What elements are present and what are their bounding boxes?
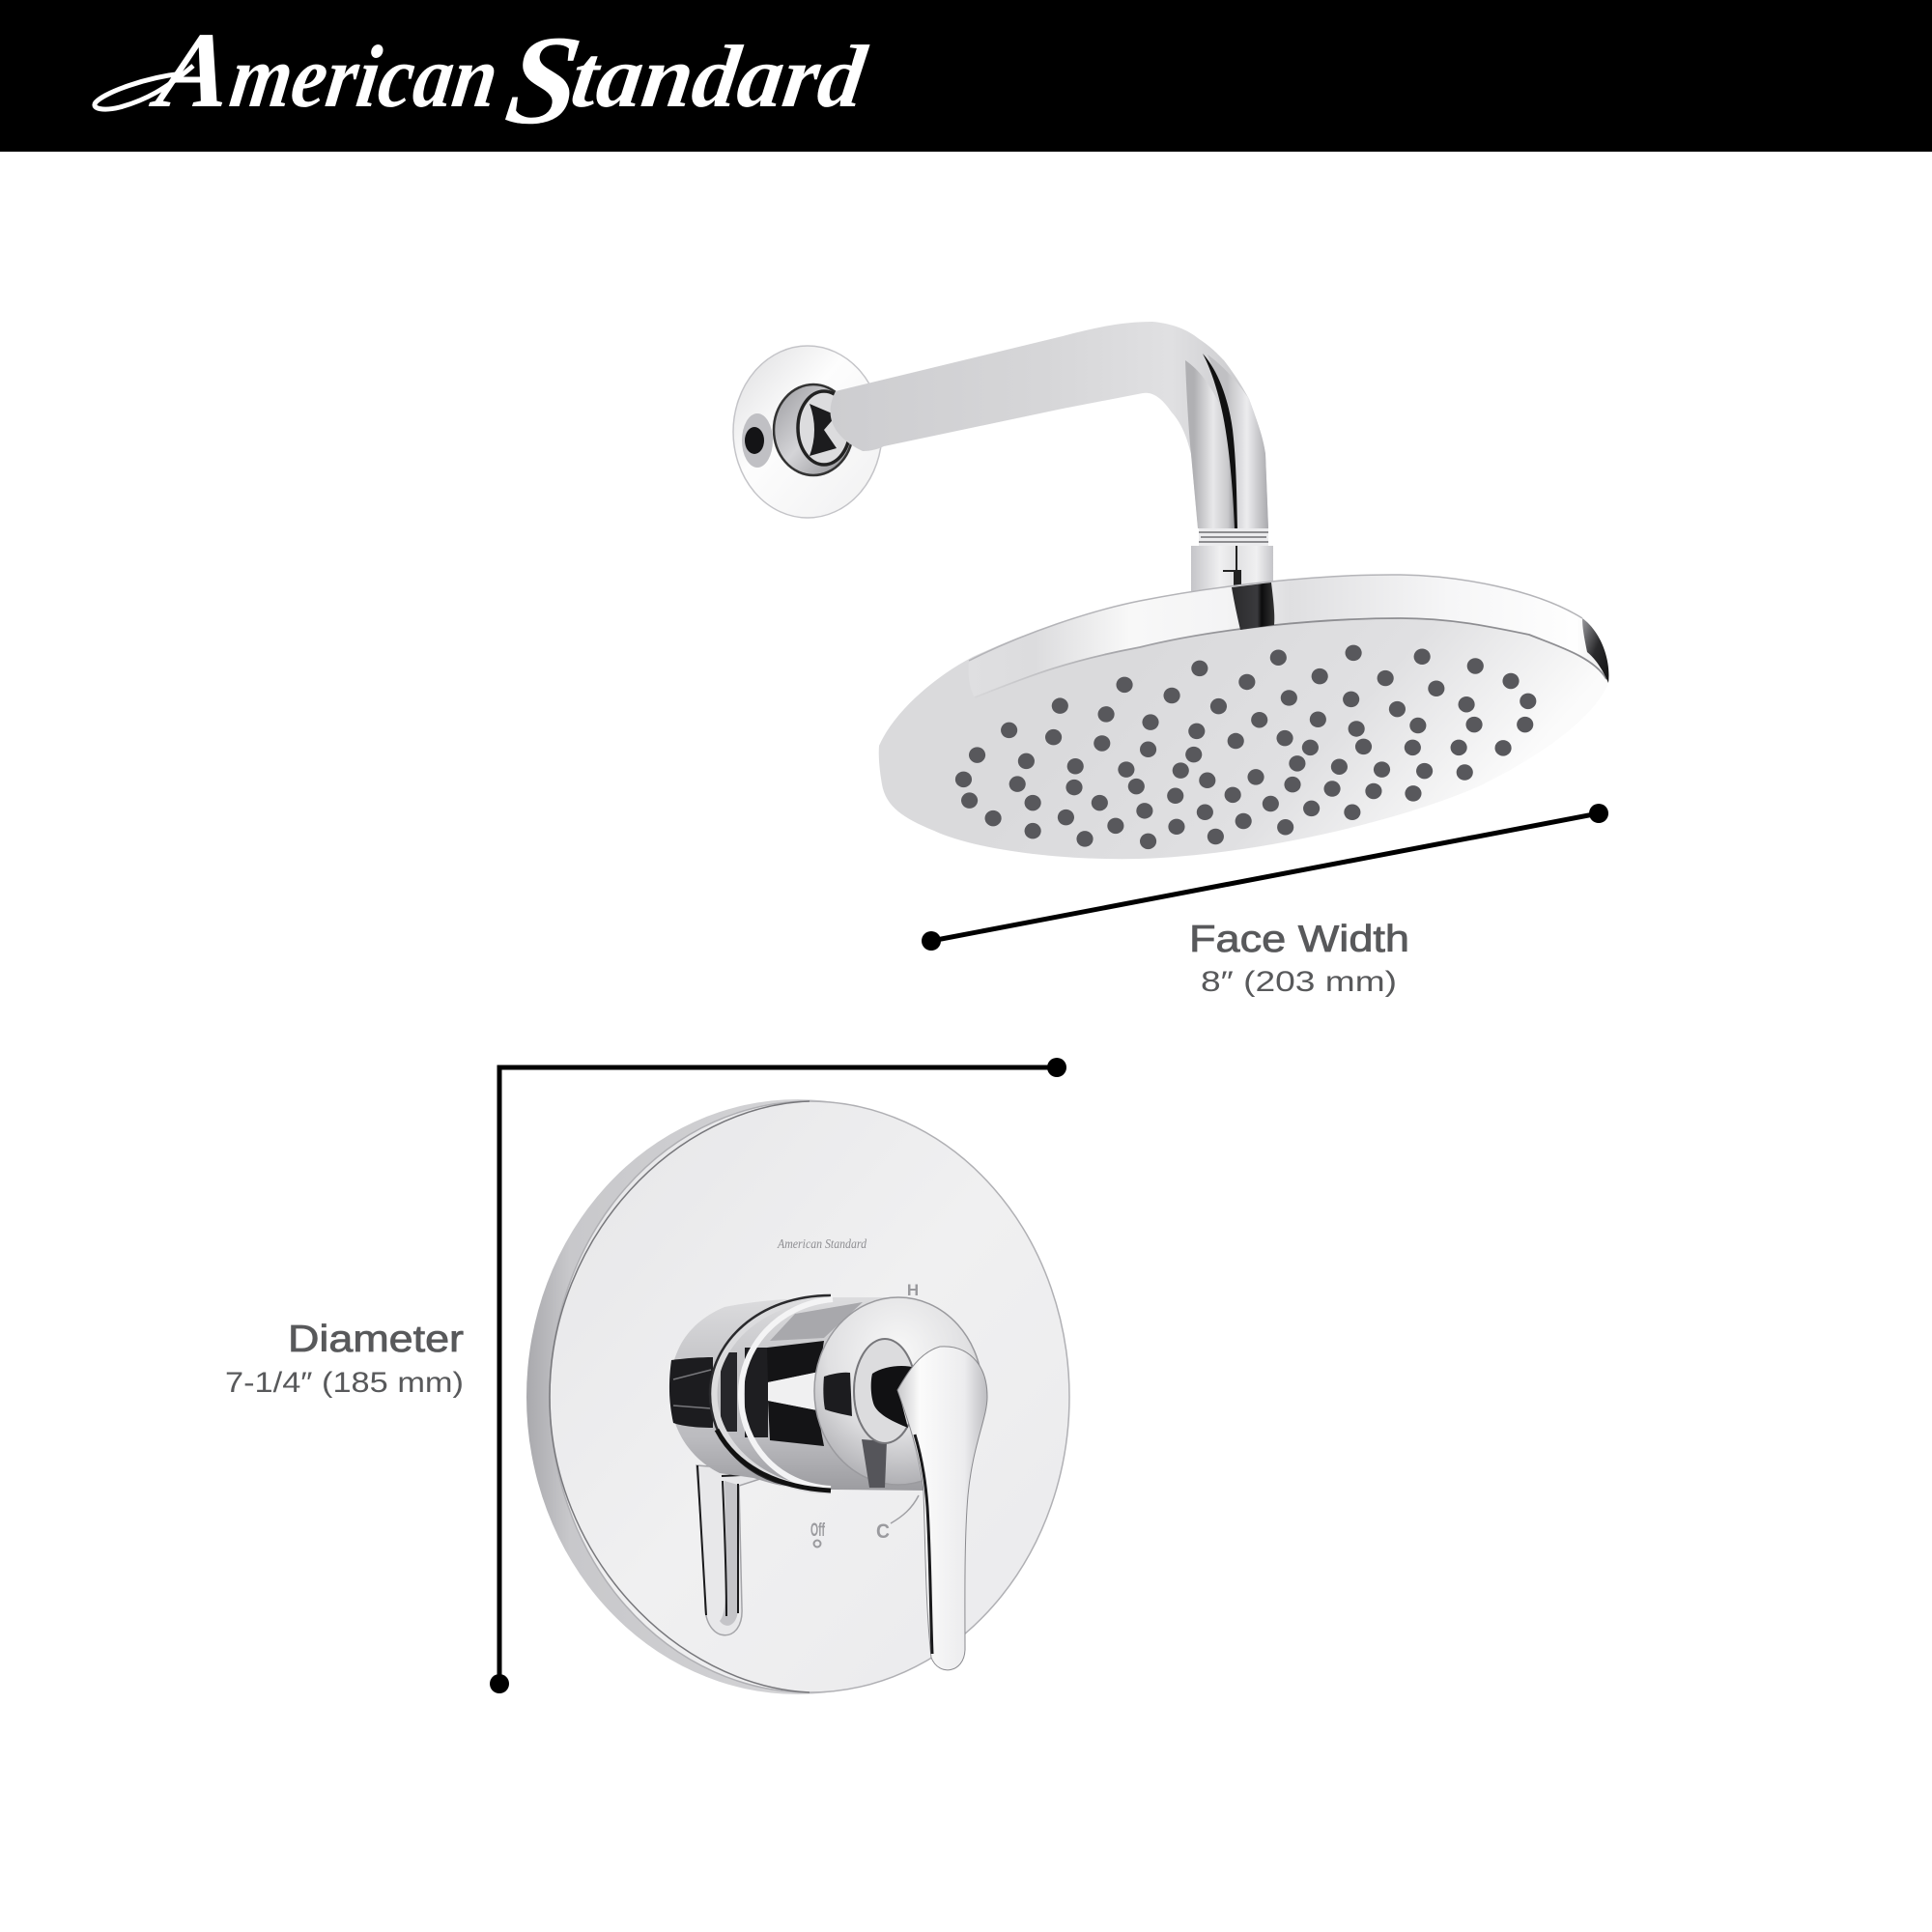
valve cylinder (669, 1297, 927, 1491)
band inner (745, 1348, 768, 1437)
logo: American Standard (95, 10, 875, 151)
logo wordmark: S (498, 10, 589, 151)
upper dark block (767, 1341, 824, 1382)
nut inner ring (798, 391, 850, 465)
cap streak (673, 1370, 711, 1408)
ring one (714, 1297, 831, 1491)
label: face width: 8″ (203 mm) (1201, 966, 1397, 998)
flange hole reflection (742, 413, 773, 468)
back plate rim (526, 1099, 1069, 1694)
dimension line: diameter (490, 1058, 1066, 1693)
diverter centre shade (720, 1481, 738, 1626)
nut (774, 384, 853, 475)
rim inner edge (975, 618, 1606, 697)
logo wordmark: merican (225, 27, 504, 126)
sleeve (1191, 546, 1273, 594)
label: diameter: Diameter (288, 1319, 464, 1360)
ring lower shadow (717, 1430, 831, 1491)
knurled top (770, 1302, 863, 1341)
lever edge line (915, 1435, 932, 1654)
label: face width (1189, 919, 1409, 998)
spray holes (955, 645, 1536, 849)
stem dark (871, 1366, 916, 1428)
hub lower reflections (862, 1439, 887, 1488)
mid body highlight (768, 1372, 819, 1410)
diverter edge lines (697, 1465, 763, 1616)
hub disc (814, 1297, 982, 1485)
head body and face (879, 575, 1608, 859)
label: diameter (225, 1319, 464, 1399)
band between rings (721, 1352, 737, 1432)
flange hole (745, 427, 764, 454)
logo swash (95, 66, 193, 109)
shower valve trim (526, 1099, 1069, 1694)
shower arm (831, 322, 1268, 528)
cap dark reflection (669, 1357, 713, 1428)
label: diameter: 7-1/4″ (185 mm) (225, 1367, 464, 1399)
small engraved logo: American Standard (777, 1237, 867, 1252)
lower dark block (768, 1401, 824, 1446)
temperature arc (891, 1495, 919, 1523)
threaded collar (1199, 528, 1268, 546)
engraved C: C (876, 1520, 890, 1543)
engraved off marker (813, 1540, 821, 1548)
diverter body (696, 1465, 763, 1635)
rim top edge (969, 575, 1582, 661)
shower head (879, 575, 1608, 859)
plate left edge line (550, 1101, 810, 1692)
rim (969, 575, 1604, 697)
diverter lever (696, 1465, 763, 1635)
dimension line: face width (922, 804, 1608, 951)
logo wordmark: tandard (566, 27, 873, 126)
rim dark end (1582, 618, 1608, 683)
engraved Off: Off (810, 1520, 825, 1541)
nut dark reflection (810, 404, 837, 456)
wall flange (733, 346, 882, 518)
header bar (0, 0, 1932, 152)
stem ring (854, 1339, 916, 1443)
lever body (897, 1347, 987, 1670)
elbow right highlight (1208, 355, 1268, 528)
sleeve reflection (1223, 546, 1241, 585)
flange disc (733, 346, 882, 518)
elbow dark line (1203, 354, 1237, 528)
hub dark reflection (823, 1373, 852, 1416)
main lever (897, 1347, 987, 1670)
ring one shadow (710, 1295, 831, 1486)
elbow left highlight (1185, 360, 1236, 528)
logo wordmark: A (145, 11, 240, 130)
engraved H: H (907, 1281, 919, 1299)
ring two (741, 1299, 833, 1489)
label: face width: Face Width (1189, 919, 1409, 960)
rim dark band (1232, 582, 1274, 630)
front plate (550, 1101, 1069, 1692)
